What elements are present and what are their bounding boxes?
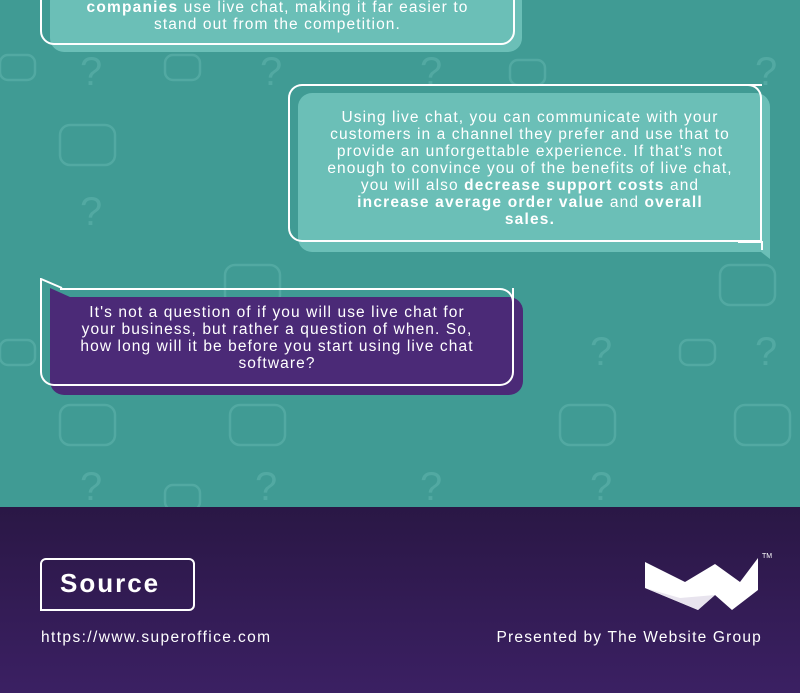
background pattern: ? — [80, 50, 102, 94]
background pattern: ? — [755, 330, 777, 374]
logo — [645, 553, 772, 610]
text: question: It's not a question of if you will use live chat for — [89, 304, 465, 321]
source heading — [40, 558, 195, 611]
text: benefits: customers in a channel they prefer and use that to — [330, 126, 730, 143]
source heading: Source — [60, 568, 160, 598]
background pattern: ? — [80, 190, 102, 234]
source url: https://www.superoffice.com — [41, 629, 271, 646]
background pattern: ? — [755, 50, 777, 94]
text: benefits: provide an unforgettable experience. If that's not — [337, 143, 723, 160]
background pattern: ? — [590, 330, 612, 374]
presented by: Presented by The Website Group — [497, 629, 762, 646]
text: benefits: increase average order value and overall — [357, 194, 703, 211]
text: benefits: sales. — [505, 211, 555, 228]
background pattern — [0, 50, 792, 507]
footer — [0, 507, 800, 693]
bubble 3: question — [40, 278, 523, 395]
background pattern: ? — [260, 50, 282, 94]
bubble 2: benefits — [288, 84, 770, 259]
text: benefits: Using live chat, you can communicate with your — [341, 109, 719, 126]
background pattern: ? — [420, 50, 442, 94]
logo: TM — [762, 553, 772, 560]
text: question: software? — [238, 355, 316, 372]
text: question: how long will it be before you start using live chat — [80, 338, 474, 355]
text: benefits: enough to convince you of the benefits of live chat, — [327, 160, 733, 177]
bubble 1: competition — [40, 0, 522, 52]
bubble 1: competition: stand out from the competition. — [154, 16, 401, 33]
text: question — [80, 304, 474, 372]
text: benefits: you will also decrease support costs and — [361, 177, 699, 194]
text: benefits — [327, 109, 733, 228]
text: question: your business, but rather a question of when. So, — [82, 321, 472, 338]
